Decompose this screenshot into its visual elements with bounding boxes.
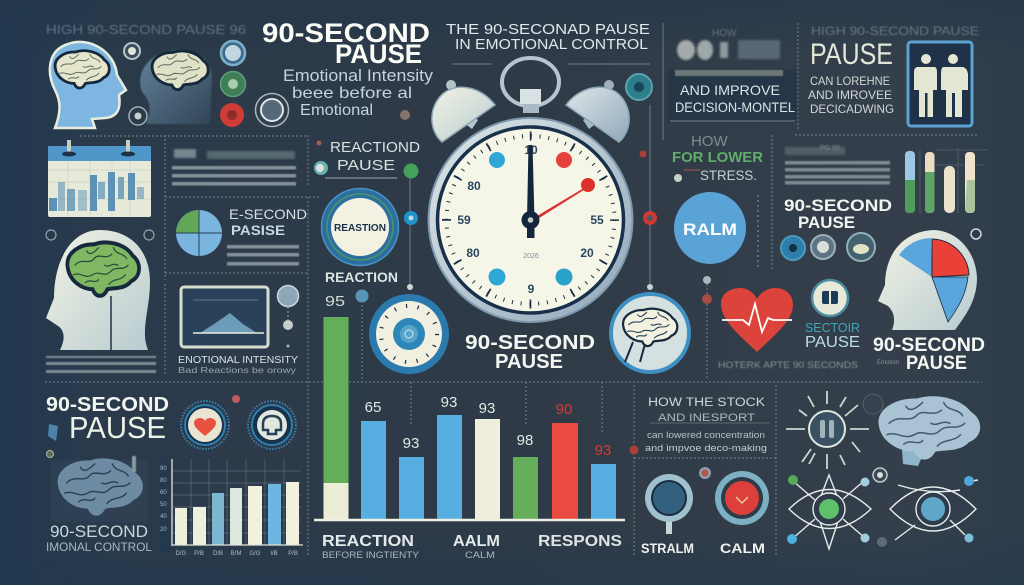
caption: emotional intensity: Bad Reactions be orowy — [178, 365, 297, 375]
bar chart: small: D/B — [213, 551, 223, 557]
icon: stress lens — [641, 474, 694, 556]
bar chart: small: 80 — [160, 478, 167, 484]
icon: blue brain — [878, 396, 980, 466]
panel: how the stock: and impvoe deco-making — [645, 443, 767, 454]
bar values: 93 — [595, 442, 611, 459]
badge: head — [248, 401, 296, 449]
bar axis labels: BEFORE INGTIENTY — [322, 550, 420, 561]
reaction heading: REACTIOND — [330, 139, 420, 156]
bar axis labels: AALM — [453, 533, 500, 550]
icon: faded head with brain — [140, 50, 212, 124]
heading: 90-second pause bottom left: PAUSE — [69, 410, 166, 445]
icon: heart with pulse — [721, 288, 793, 352]
bar chart: small: P/B — [194, 551, 204, 557]
stopwatch numbers: 80 — [466, 246, 480, 260]
stopwatch numbers: 2026 — [523, 253, 539, 260]
badge: calm — [674, 192, 746, 264]
small bars — [175, 482, 299, 545]
panel: tubes and note: PG 90 — [820, 145, 840, 152]
icon: slate brain — [46, 450, 148, 522]
icon: dial with stem — [278, 286, 298, 348]
bar chart: small: 50 — [160, 502, 167, 508]
bar chart: small: B/M — [231, 551, 241, 557]
icon: brain circle — [611, 294, 689, 372]
icon: calendar chart — [48, 140, 151, 217]
heading: lower stress: FOR LOWER — [672, 149, 763, 166]
heading: lower stress: HOW — [691, 133, 728, 150]
panel: how the stock: AND INESPORT — [658, 412, 755, 424]
panel: how it improves: HOW — [712, 28, 737, 39]
caption: emotional control — [46, 522, 152, 554]
panel: how the stock — [630, 397, 770, 479]
panel: pause text: AND IMROVEE — [808, 88, 892, 102]
caption: emotional intensity — [178, 354, 298, 375]
badge: heart — [181, 395, 240, 449]
panel: pause text — [808, 24, 979, 116]
pie icon with e-second pause: E-SECOND — [229, 206, 307, 222]
panel: how the stock: can lowered concentration — [647, 430, 765, 441]
stopwatch numbers — [457, 143, 604, 296]
main title: PAUSE — [335, 39, 422, 69]
badge: sector pause: PAUSE — [805, 334, 860, 351]
icon: sun rays — [786, 391, 887, 482]
badge: reaction — [322, 188, 398, 266]
badge: sector pause: SECTOIR — [805, 320, 860, 335]
text: 90-second pause right — [873, 335, 985, 374]
badge: calm: RALM — [683, 220, 737, 239]
bar values: 90 — [556, 401, 572, 418]
icons: status badges — [124, 41, 410, 146]
bar values: 93 — [441, 394, 457, 411]
badge: reaction: REASTION — [334, 223, 386, 234]
caption: emotional control: 90-SECOND — [50, 522, 148, 541]
icon: calm badge — [715, 471, 769, 556]
text: 90-second pause centre — [465, 332, 595, 373]
subtitle text — [283, 66, 434, 119]
icon: network eye green — [787, 475, 871, 549]
bar chart: small: G/G — [249, 551, 261, 557]
stopwatch dial dots — [488, 152, 595, 286]
bar axis labels: CALM — [465, 550, 495, 561]
stopwatch numbers: 59 — [457, 213, 471, 227]
panel: tubes and note — [781, 145, 892, 261]
text: 90-second pause right: 90-SECOND — [873, 335, 985, 356]
stopwatch numbers: 10 — [524, 143, 538, 157]
text: 90-second pause centre: PAUSE — [495, 351, 563, 373]
bar axis labels: REACTION — [322, 533, 414, 550]
icon: blue head with brain — [50, 42, 126, 128]
bar values: 65 — [365, 399, 381, 416]
heading: lower stress: STRESS. — [700, 168, 757, 183]
bars — [324, 317, 616, 519]
icon: network eye blue — [877, 472, 978, 547]
stopwatch numbers: 9 — [528, 282, 535, 296]
bar chart: small: 20 — [160, 527, 167, 533]
stopwatch bells and crown — [432, 58, 629, 142]
top centre heading — [446, 21, 650, 53]
bar axis labels: RESPONS — [538, 533, 622, 550]
subtitle text: Emotional — [300, 102, 373, 119]
bar chart: small: 40 — [160, 514, 167, 520]
heading: 90-second pause bottom left — [46, 394, 169, 445]
panel: pause text: PAUSE — [810, 38, 893, 71]
note: heart caption: HOTERK APTE 90 SECONDS — [718, 360, 858, 370]
pie icon with e-second pause — [176, 206, 307, 266]
bar values: 93 — [479, 400, 495, 417]
heading: lower stress — [672, 133, 763, 183]
panel: blurred note — [172, 149, 296, 186]
text: 90-second pause centre: 90-SECOND — [465, 332, 595, 354]
panel: how it improves: AND IMPROVE — [680, 82, 780, 98]
stopwatch numbers: 80 — [467, 179, 481, 193]
bar chart: main — [314, 317, 625, 561]
panel: how it improves — [668, 28, 797, 122]
stopwatch numbers: 55 — [590, 213, 604, 227]
panel: pause text: DECICADWING — [810, 102, 894, 116]
icon: small timer dial — [356, 290, 449, 374]
connector dots: centre right — [626, 74, 758, 304]
reaction heading: PAUSE — [337, 157, 395, 174]
icon: stress lens: STRALM — [641, 541, 694, 556]
text: 90-second pause right: Emotion — [877, 360, 899, 366]
bar values: 98 — [517, 432, 533, 449]
subtitle text: beee before al — [292, 85, 412, 102]
chart: tube gauges — [905, 148, 988, 213]
stopwatch — [428, 58, 632, 322]
bar chart: small — [160, 459, 303, 557]
bar chart: small: 60 — [160, 490, 167, 496]
icon: monitor chart — [181, 287, 268, 347]
icon: green brain head — [46, 230, 156, 373]
icon: head with pie chart — [878, 229, 981, 330]
stopwatch hands — [522, 145, 592, 238]
bar chart: small: I/B — [270, 551, 278, 557]
heading: 90-second pause bottom left: 90-SECOND — [46, 394, 169, 416]
panel: tubes and note: PAUSE — [798, 213, 855, 232]
panel: how the stock: HOW THE STOCK — [648, 397, 765, 409]
top centre heading: IN EMOTIONAL CONTROL — [455, 36, 648, 53]
main title — [262, 18, 430, 69]
top centre heading: THE 90-SECONAD PAUSE — [446, 21, 650, 38]
bar chart: small: P/B — [288, 551, 298, 557]
bar values — [365, 394, 611, 459]
bar chart: small: D/G — [176, 551, 187, 557]
caption: emotional intensity: ENOTIONAL INTENSITY — [178, 354, 298, 366]
bar chart: small: 90 — [160, 466, 167, 472]
small heading: top left: HIGH 90-SECOND PAUSE 96 — [46, 22, 246, 37]
panel: pause text: HIGH 90-SECOND PAUSE — [811, 24, 979, 38]
value: 95: 95 — [325, 293, 345, 310]
panel: pause text: CAN LOREHNE — [810, 74, 890, 88]
main title: 90-SECOND — [262, 18, 430, 48]
pie icon with e-second pause: PASISE — [231, 222, 285, 238]
icon: calm badge: CALM — [720, 541, 765, 556]
text: 90-second pause right: PAUSE — [906, 353, 967, 374]
panel: how it improves: DECISION-MONTEL — [675, 99, 795, 115]
reaction heading — [314, 139, 420, 290]
subtitle text: Emotional Intensity — [283, 66, 434, 85]
bar axis labels — [322, 533, 622, 561]
caption: emotional control: IMONAL CONTROL — [46, 540, 152, 554]
badge: sector pause — [805, 280, 860, 351]
label: reaction: REACTION — [325, 270, 398, 285]
panel: tubes and note: 90-SECOND — [784, 196, 892, 215]
icon: two people — [908, 42, 972, 126]
stopwatch numbers: 20 — [580, 246, 594, 260]
bar values: 93 — [403, 435, 419, 452]
